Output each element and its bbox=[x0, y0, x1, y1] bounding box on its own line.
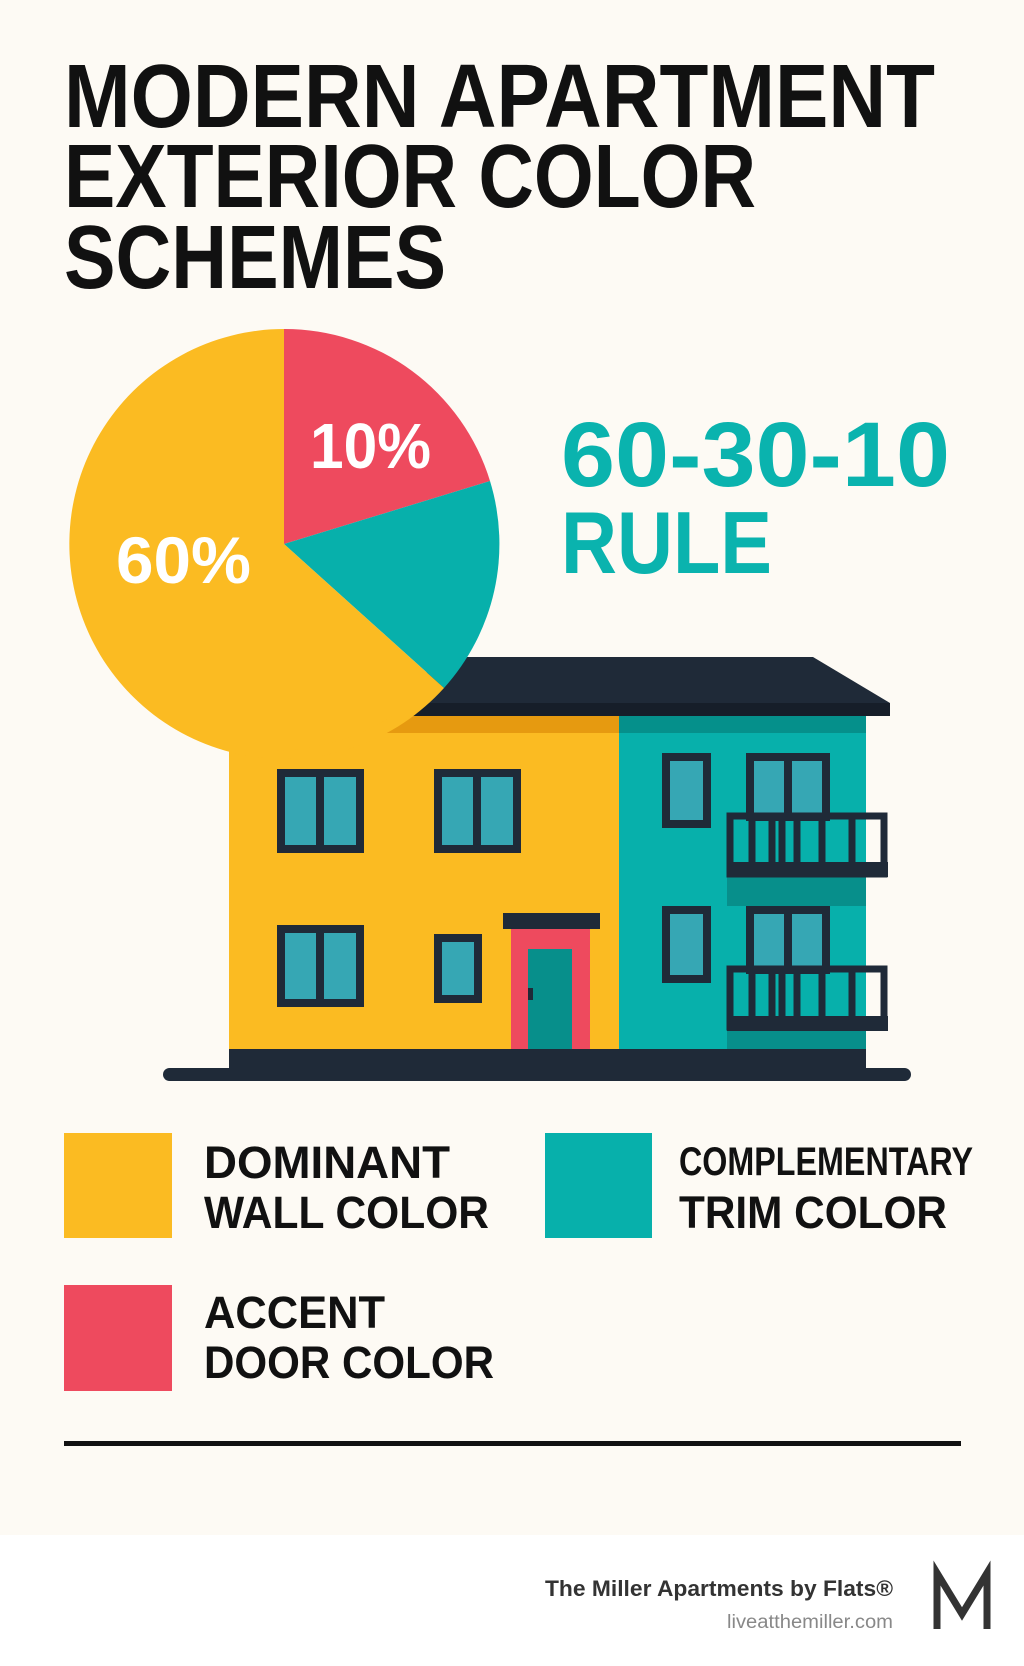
footer: liveatthemiller.com bbox=[727, 1612, 893, 1633]
legend: complementary bbox=[545, 1133, 973, 1238]
base bbox=[229, 1049, 866, 1069]
legend: accent bbox=[64, 1285, 494, 1391]
footer: The Miller Apartments by Flats® bbox=[545, 1576, 893, 1601]
pie labels: 10% bbox=[310, 410, 431, 482]
pie chart bbox=[69, 329, 499, 759]
rule heading: 60-30-10 bbox=[561, 404, 950, 506]
legend: accent: DOOR COLOR bbox=[204, 1337, 494, 1388]
wall teal bbox=[619, 716, 866, 1049]
legend: dominant bbox=[64, 1133, 489, 1238]
logo M bbox=[937, 1573, 987, 1629]
legend: accent: ACCENT bbox=[204, 1287, 385, 1338]
roof bbox=[392, 657, 890, 703]
windows yellow section bbox=[281, 757, 826, 1003]
title bbox=[64, 47, 935, 308]
pie chart: 60% bbox=[116, 523, 251, 597]
building illustration bbox=[163, 657, 911, 1081]
legend: dominant: DOMINANT bbox=[204, 1137, 450, 1188]
title: MODERN APARTMENT bbox=[64, 47, 935, 147]
legend: complementary: TRIM COLOR bbox=[679, 1187, 947, 1238]
balconies bbox=[730, 816, 884, 1027]
legend: dominant: WALL COLOR bbox=[204, 1187, 489, 1238]
wall yellow bbox=[229, 716, 619, 1049]
door bbox=[503, 913, 600, 1049]
footer bbox=[545, 1573, 987, 1633]
rule heading: RULE bbox=[561, 493, 772, 592]
rule heading bbox=[561, 404, 950, 592]
title: EXTERIOR COLOR bbox=[64, 127, 756, 227]
title: SCHEMES bbox=[64, 208, 446, 308]
